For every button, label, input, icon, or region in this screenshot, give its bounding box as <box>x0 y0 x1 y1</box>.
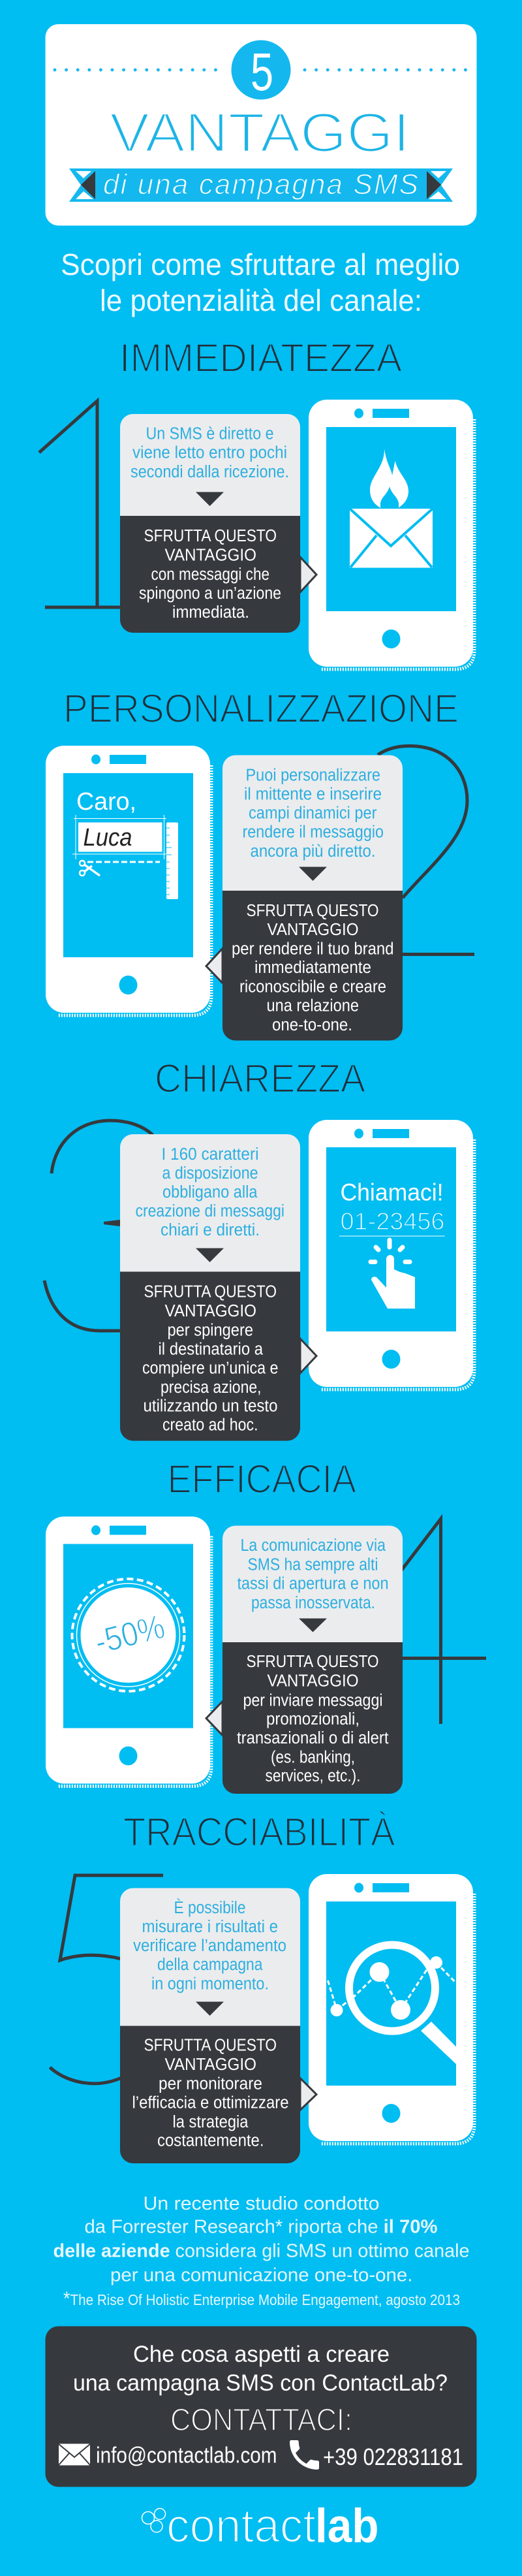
text: box 5 description: verificare l’andamento <box>133 1937 286 1955</box>
text: box 3 description: a disposizione <box>162 1164 258 1183</box>
text: box 2 action: one-to-one. <box>272 1016 352 1034</box>
text: box 5 action: per monitorare <box>159 2075 262 2093</box>
text: box 5 description: in ogni momento. <box>151 1975 269 1993</box>
icon: envelope <box>350 509 433 568</box>
text: box 3 action: precisa azione, <box>161 1378 261 1397</box>
text: box 4 description <box>238 1536 389 1612</box>
text: Chiamaci: Chiamaci! <box>341 1179 444 1205</box>
title: VANTAGGI: VANTAGGI <box>110 102 410 163</box>
numeral 2 <box>378 746 474 955</box>
text: phone number: +39 022831181 <box>323 2443 463 2470</box>
logo: contactlab <box>142 2500 378 2552</box>
text: research statistic: per una comunicazione one-to-one. <box>110 2265 412 2285</box>
text: box 3 action: creato ad hoc. <box>162 1416 258 1434</box>
numeral 5 <box>50 1875 163 2084</box>
logo: contactlab: lab <box>315 2500 378 2552</box>
text: research statistic: Un recente studio condotto <box>144 2193 380 2214</box>
heading: chiarezza: CHIAREZZA <box>155 1057 365 1101</box>
text: box 3 action: SFRUTTA QUESTO <box>144 1282 277 1301</box>
text: box 5 action: SFRUTTA QUESTO <box>144 2036 277 2054</box>
badge: -50%: -50% <box>91 1608 168 1662</box>
text: box 4 description: SMS ha sempre alti <box>248 1555 378 1574</box>
icon: ruler <box>166 823 178 899</box>
logo: contactlab: contact <box>166 2500 316 2552</box>
text: box 3 action: VANTAGGIO <box>164 1302 256 1320</box>
icon: mail <box>59 2443 90 2466</box>
text: box 4 description: passa inosservata. <box>251 1594 375 1612</box>
icon: tapping hand <box>371 1240 415 1309</box>
text: question: una campagna SMS con ContactLab? <box>73 2370 448 2396</box>
panel: box 1 <box>120 414 316 633</box>
text: contattaci: CONTATTACI: <box>170 2403 352 2438</box>
text: box 1 description: viene letto entro pochi <box>132 444 287 462</box>
text: box 5 action <box>132 2036 288 2150</box>
text: box 2 action: VANTAGGIO <box>268 921 359 939</box>
text: box 4 action: promozionali, <box>266 1710 360 1728</box>
text: box 2 description: rendere il messaggio <box>243 823 384 841</box>
icon: scissors and cut line <box>80 861 160 876</box>
phone 2 with editable name <box>46 746 211 1015</box>
text: box 2 description: campi dinamici per <box>249 804 377 823</box>
panel: contact call to action <box>46 2326 476 2487</box>
numeral 3 <box>44 1121 153 1331</box>
field: Luca: Luca <box>84 824 132 851</box>
heading: efficacia: EFFICACIA <box>167 1457 356 1501</box>
text: box 2 action: riconoscibile e creare <box>239 978 386 996</box>
text: box 5 action: costantemente. <box>157 2131 264 2150</box>
text: box 5 description: È possibile <box>174 1898 245 1917</box>
text: box 3 action: il destinatario a <box>158 1340 264 1358</box>
text: phone number: 01-23456 <box>341 1208 445 1235</box>
text: box 1 action: spingono a un’azione <box>139 584 281 603</box>
text: research statistic: delle aziende considera gli SMS un ottimo canale <box>54 2241 470 2262</box>
text: box 5 action: l’efficacia e ottimizzare <box>132 2093 288 2112</box>
text: box 2 action: SFRUTTA QUESTO <box>247 902 378 920</box>
intro text <box>61 247 460 317</box>
text: box 2 action: immediatamente <box>254 959 371 977</box>
text: box 3 action: utilizzando un testo <box>144 1397 278 1416</box>
text: box 3 action <box>142 1282 278 1434</box>
field: Luca <box>72 815 168 859</box>
text: box 3 description: I 160 caratteri <box>162 1145 258 1164</box>
panel: header card <box>46 24 476 226</box>
text: box 4 action: per inviare messaggi <box>243 1691 382 1709</box>
text: box 1 description <box>130 424 289 481</box>
text: box 1 action <box>139 527 281 622</box>
phone 5 with magnifier chart <box>309 1874 474 2144</box>
heading: personalizzazione: PERSONALIZZAZIONE <box>63 686 459 731</box>
heading: tracciabilita: TRACCIABILITÀ <box>123 1810 395 1854</box>
icon: chart and magnifying glass <box>328 1945 456 2064</box>
text: question: Che cosa aspetti a creare <box>133 2342 390 2367</box>
text: box 1 action: immediata. <box>172 603 249 622</box>
text: research statistic <box>54 2193 470 2285</box>
text: box 2 description: Puoi personalizzare <box>245 767 380 785</box>
numeral 1 <box>39 401 121 607</box>
icon: telephone <box>290 2440 319 2470</box>
text: box 1 description: Un SMS è diretto e <box>146 424 274 443</box>
text: box 2 action: una relazione <box>266 996 359 1015</box>
text: box 4 description: tassi di apertura e non <box>238 1575 389 1593</box>
text: box 3 description: creazione di messaggi <box>136 1202 284 1220</box>
text: box 4 action: SFRUTTA QUESTO <box>247 1653 378 1671</box>
heading: immediatezza: IMMEDIATEZZA <box>119 336 402 380</box>
ribbon: subtitle: di una campagna SMS <box>103 168 418 200</box>
text: email: info@contactlab.com <box>96 2443 277 2468</box>
text: box 4 action: VANTAGGIO <box>268 1672 359 1690</box>
text: box 4 action <box>237 1653 389 1785</box>
badge: number five <box>231 40 291 102</box>
text: box 3 description: chiari e diretti. <box>161 1221 260 1239</box>
text: box 4 action: transazionali o di alert <box>237 1729 389 1747</box>
text: box 2 description: il mittente e inserire <box>244 785 382 803</box>
icon: flame <box>370 449 408 508</box>
text: box 2 action: per rendere il tuo brand <box>232 940 394 959</box>
phone 1 with message on fire icon <box>309 400 474 669</box>
text: box 4 action: services, etc.). <box>265 1767 360 1785</box>
intro text: Scopri come sfruttare al meglio <box>61 247 460 281</box>
panel: box 4 <box>206 1525 403 1794</box>
panel: box 5 <box>120 1888 316 2163</box>
numeral 4 <box>401 1519 486 1724</box>
text: box 3 description <box>136 1145 284 1239</box>
badge: number five: 5 <box>251 42 273 102</box>
text: box 2 action <box>232 902 394 1034</box>
panel: box 3 <box>120 1134 316 1440</box>
text: box 1 action: con messaggi che <box>151 565 269 584</box>
text: question <box>73 2342 448 2396</box>
phone 3 with call to action <box>309 1120 474 1390</box>
text: box 3 description: obbligano alla <box>162 1183 258 1201</box>
text: footnote: *The Rise Of Holistic Enterprise Mobile Engagement, agosto 2013 <box>63 2288 460 2310</box>
text: box 4 description: La comunicazione via <box>240 1536 386 1555</box>
text: box 5 action: VANTAGGIO <box>164 2056 256 2074</box>
text: box 3 action: compiere un’unica e <box>142 1360 278 1378</box>
text: box 1 action: SFRUTTA QUESTO <box>144 527 277 545</box>
text: box 5 action: la strategia <box>172 2113 249 2131</box>
badge: -50% <box>72 1579 184 1691</box>
text: Caro: Caro, <box>76 788 136 816</box>
text: box 5 description <box>133 1898 286 1993</box>
text: box 3 action: per spingere <box>167 1322 253 1340</box>
text: box 5 description: misurare i risultati e <box>142 1918 278 1936</box>
text: box 2 description: ancora più diretto. <box>251 842 376 861</box>
text: box 4 action: (es. banking, <box>271 1749 355 1767</box>
text: box 1 description: secondi dalla ricezione. <box>130 463 289 481</box>
phone 4 with discount badge <box>46 1516 211 1787</box>
intro text: le potenzialità del canale: <box>100 283 422 317</box>
text: box 5 description: della campagna <box>157 1956 263 1974</box>
text: research statistic: da Forrester Research* riporta che il 70% <box>85 2216 438 2237</box>
text: box 1 action: VANTAGGIO <box>164 546 256 564</box>
text: box 2 description <box>243 767 384 861</box>
panel: box 2 <box>206 755 403 1041</box>
